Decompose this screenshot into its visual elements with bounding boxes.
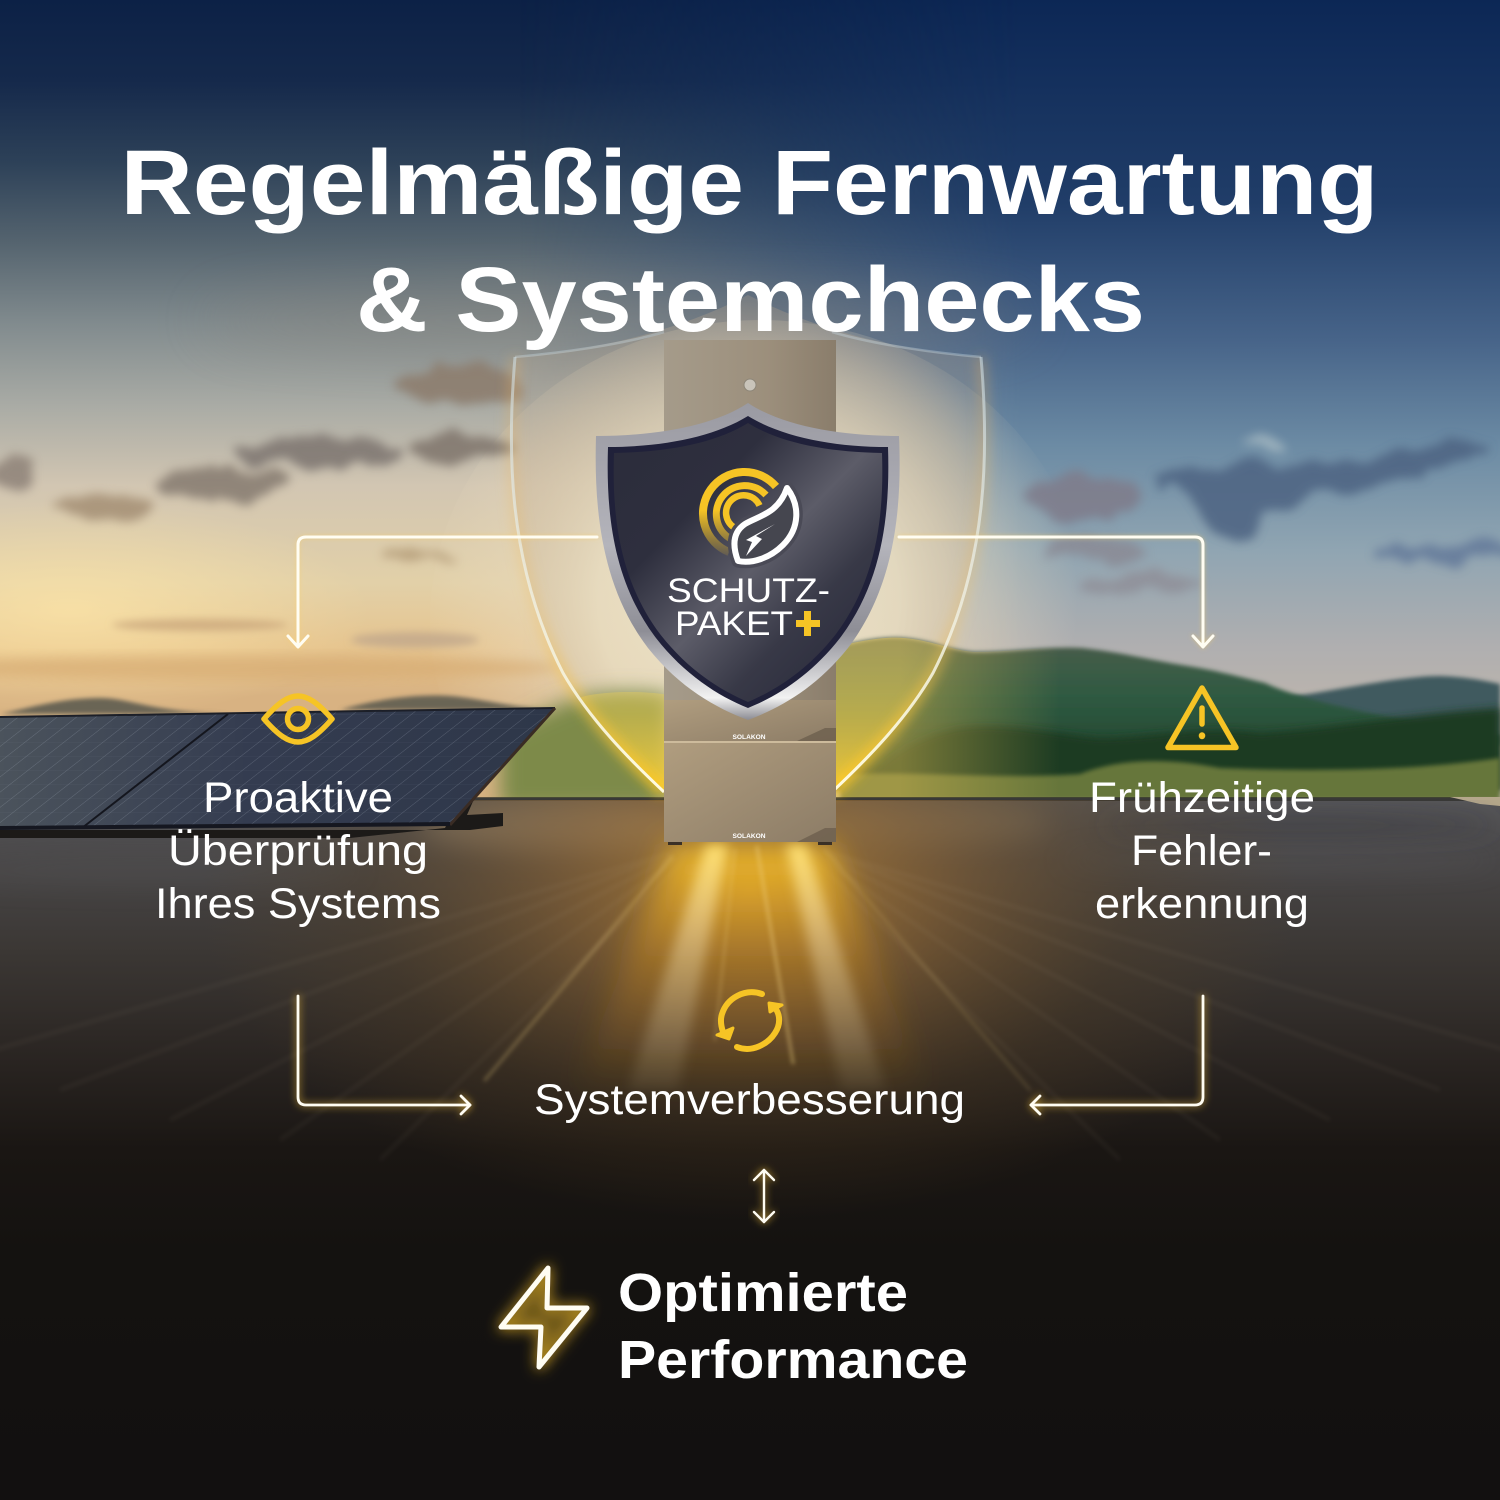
clouds right bbox=[1027, 437, 1500, 592]
text: right column: Fehler- bbox=[1131, 827, 1272, 875]
protective halo shield bbox=[511, 332, 985, 792]
battery storage device: SOLAKON bbox=[732, 833, 766, 840]
text: right column: Frühzeitige bbox=[1089, 774, 1315, 822]
shield label: PAKET bbox=[675, 605, 793, 643]
text: left column bbox=[155, 774, 441, 928]
arrow: left column to system improvement bbox=[298, 996, 470, 1114]
arrow: right column to system improvement bbox=[1031, 996, 1203, 1114]
hills right bbox=[825, 638, 1500, 790]
text: optimized performance: Optimierte bbox=[618, 1263, 908, 1323]
shield label: SCHUTZ- bbox=[667, 572, 830, 610]
arrow: bidirectional bbox=[754, 1170, 774, 1222]
battery storage device: SOLAKON bbox=[732, 734, 766, 741]
hills behind solar panel bbox=[500, 692, 670, 810]
shield logo bbox=[703, 472, 796, 562]
text: left column: Überprüfung bbox=[168, 827, 428, 875]
text: right column: erkennung bbox=[1095, 880, 1309, 928]
clouds left bbox=[0, 365, 525, 559]
title: & Systemchecks bbox=[356, 249, 1145, 351]
halo interior light bbox=[514, 295, 983, 694]
icon: eye bbox=[264, 696, 332, 742]
text: right column bbox=[1089, 774, 1315, 928]
distant hills left bbox=[0, 696, 560, 714]
icon: warning triangle bbox=[1168, 688, 1236, 748]
icon: refresh cycle bbox=[717, 992, 782, 1049]
title: Regelmäßige Fernwartung bbox=[120, 132, 1378, 234]
text: left column: Proaktive bbox=[203, 774, 393, 822]
title bbox=[120, 132, 1378, 351]
light rays below the device bbox=[485, 845, 1030, 1100]
arrow: shield to left column bbox=[288, 537, 597, 647]
text: system improvement: Systemverbesserung bbox=[534, 1076, 965, 1124]
icon: lightning bolt bbox=[501, 1268, 587, 1367]
shield badge bbox=[596, 403, 900, 720]
shield label bbox=[667, 572, 830, 643]
ground bbox=[0, 798, 1500, 1500]
arrow: shield to right column bbox=[899, 537, 1213, 647]
text: optimized performance bbox=[618, 1263, 968, 1390]
battery storage device bbox=[664, 340, 836, 845]
text: optimized performance: Performance bbox=[618, 1330, 968, 1390]
ground motion streaks bbox=[0, 850, 1500, 1160]
solar panels bbox=[0, 708, 555, 838]
text: left column: Ihres Systems bbox=[155, 880, 441, 928]
